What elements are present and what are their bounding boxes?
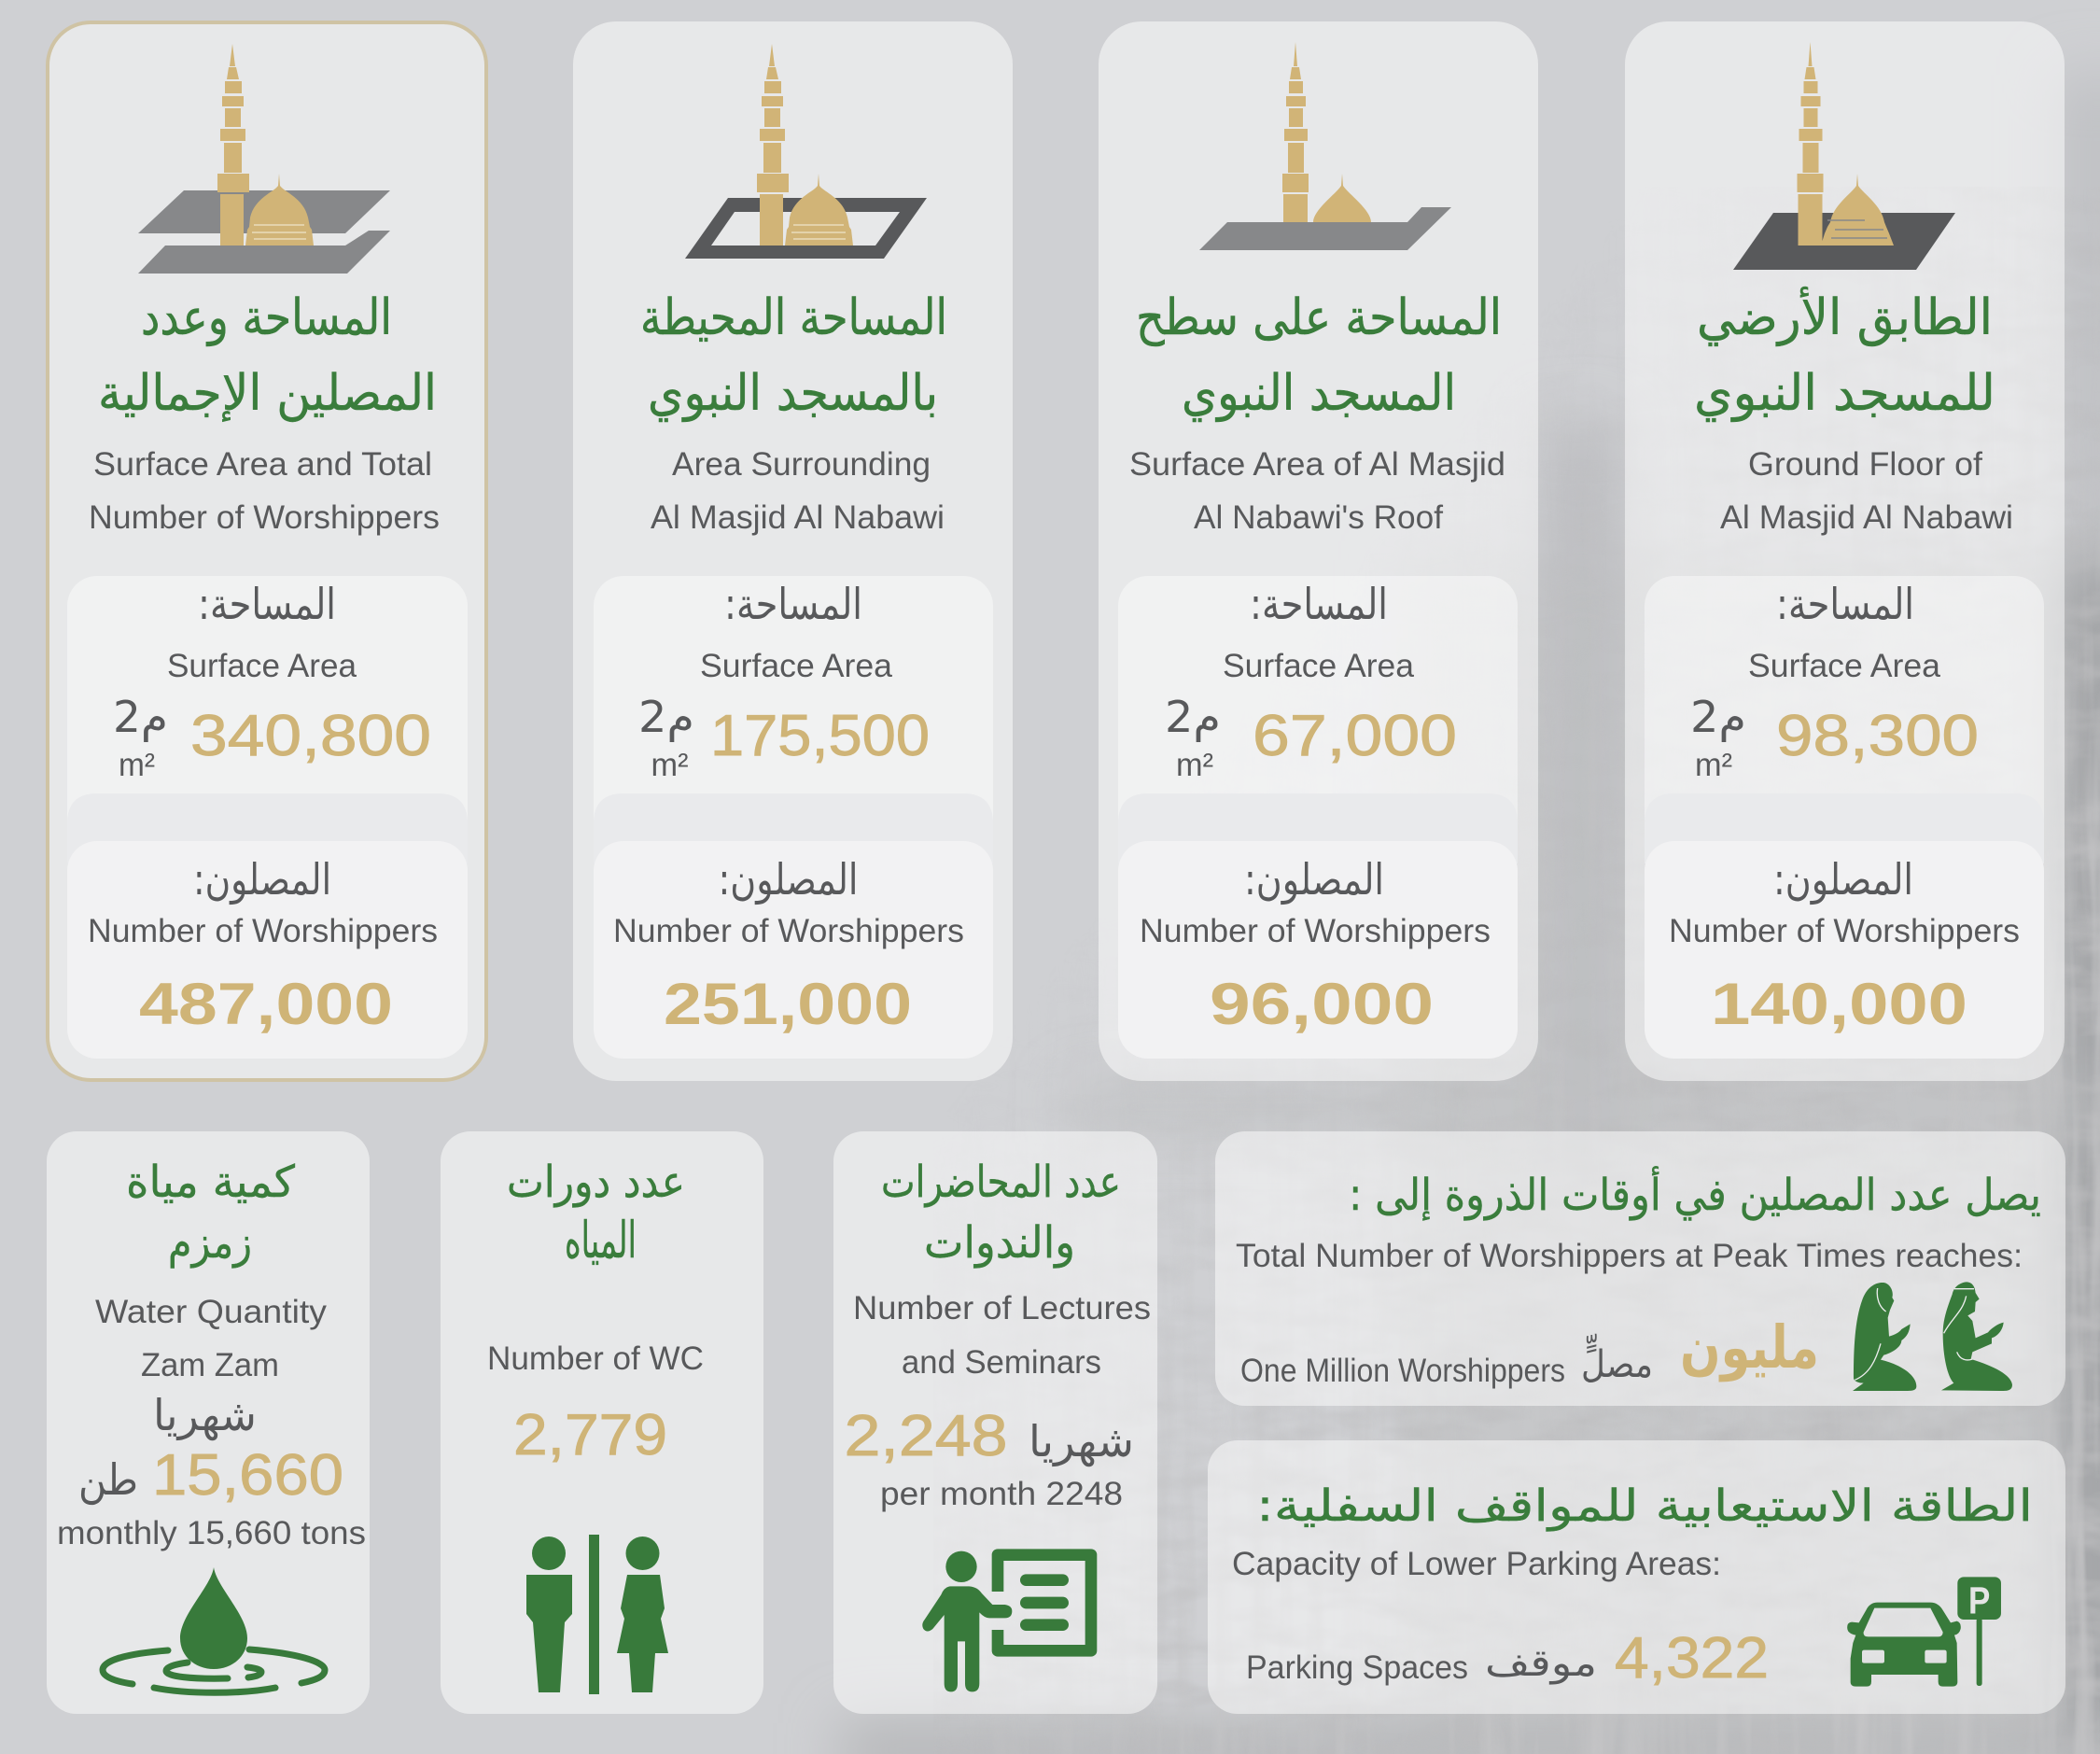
icon: minaret and dome on roof plate [1199,42,1451,250]
heading: English title: Area Surrounding [672,446,931,483]
text: monthly in Arabic: شهريا [1029,1416,1134,1467]
heading: Arabic title line 2: المصلين الإجمالية [98,365,437,422]
heading: Arabic title line 2: المياه [565,1211,637,1270]
panel: surface area of the roof [1099,21,1538,1081]
sub-panel: surface area: Surface Area [700,648,893,684]
heading: Arabic title line 2: المسجد النبوي [1182,365,1456,422]
sub-panel: worshippers: المصلون: [1773,854,1913,905]
sub-panel: worshippers: 487,000 [139,972,393,1037]
heading: Arabic title line 2: زمزم [168,1217,252,1269]
icon: minaret and dome on ground plate [1733,42,1955,270]
sub-panel: surface area: m² [1176,747,1213,783]
heading: English title line 2: Al Masjid Al Nabawi [1720,499,2013,536]
heading: English title: Surface Area and Total [93,446,432,483]
sub-panel: worshippers: 96,000 [1210,972,1434,1037]
sub-panel: surface area: Surface Area [167,648,357,684]
sub-panel: surface area: 98,300 [1776,704,1979,768]
sub-panel: worshippers [67,841,468,1059]
icon: praying woman and man [1853,1282,2012,1391]
text: one million worshippers: One Million Worshippers [1240,1353,1565,1389]
panel: worshippers at peak times [1215,1131,2065,1406]
icon: presenter at board [922,1551,1091,1691]
sub-panel: surface area: 340,800 [190,704,431,768]
panel: ground floor [1625,21,2065,1081]
sub-panel: surface area [1645,576,2044,863]
sub-panel: worshippers: Number of Worshippers [1140,913,1491,949]
heading: English title: Number of Lectures [853,1290,1151,1326]
sub-panel: worshippers: Number of Worshippers [88,913,438,949]
sub-panel: surface area [594,576,993,863]
icon: minaret and dome inside outlined plaza [685,44,927,259]
panel: number of WC [441,1131,763,1714]
text: monthly in Arabic: شهريا [153,1390,257,1441]
heading: English title line 2: and Seminars [902,1344,1101,1381]
heading: English title: Number of WC [487,1340,704,1377]
sub-panel: worshippers: المصلون: [719,854,859,905]
panel: parking capacity [1208,1440,2065,1714]
heading: Arabic title: المساحة المحيطة [640,289,947,346]
sub-panel: surface area [67,576,468,863]
sub-panel: surface area: م2 [638,692,694,742]
heading: English title line 2: Zam Zam [141,1347,279,1383]
sub-panel: worshippers: Number of Worshippers [613,913,964,949]
number: WC count: 2,779 [513,1403,667,1467]
icon: man and woman restroom sign [526,1535,668,1694]
sub-panel: worshippers: 251,000 [664,972,912,1037]
sub-panel: surface area: المساحة: [1250,579,1388,629]
sub-panel: surface area: Surface Area [1223,648,1415,684]
icon: water drop with ripples [103,1567,325,1692]
heading: English title: Surface Area of Al Masjid [1129,446,1505,483]
sub-panel: surface area: م2 [113,692,168,742]
heading: Arabic title: يصل عدد المصلين في أوقات الذروة إلى : [1349,1166,2041,1221]
panel: area surrounding the mosque [573,21,1013,1081]
number: parking count: 4,322 [1615,1626,1769,1691]
number: lectures per month: 2,248 [844,1404,1008,1468]
heading: Arabic title: الطابق الأرضي [1697,287,1993,346]
sub-panel: surface area: م2 [1690,692,1746,742]
heading: Arabic title line 2: بالمسجد النبوي [648,365,938,422]
heading: English title line 2: Al Masjid Al Nabawi [651,499,945,536]
heading: Arabic title line 2: والندوات [924,1217,1075,1269]
heading: Arabic title: عدد دورات [507,1157,685,1208]
text: tons in Arabic: طن [78,1454,138,1506]
heading: Arabic title: الطاقة الاستيعابية للمواقف السفلية: [1256,1480,2033,1532]
text: per month in English: per month 2248 [880,1476,1123,1512]
heading: English title: Total Number of Worshippers at Peak Times reaches: [1236,1238,2023,1274]
sub-panel: surface area: 175,500 [710,704,930,768]
sub-panel: surface area: Surface Area [1748,648,1941,684]
heading: English title: Capacity of Lower Parking Areas: [1232,1546,1721,1582]
icon: minaret and dome over two levels [138,44,390,274]
heading: Arabic title: المساحة وعدد [141,289,392,346]
heading: Arabic title: كمية مياة [126,1157,296,1208]
heading: English title: Ground Floor of [1748,446,1982,483]
sub-panel: worshippers: المصلون: [1244,854,1384,905]
text: parking spaces in Arabic: موقف [1485,1642,1597,1685]
number: million in Arabic: مليون [1680,1313,1819,1382]
sub-panel: surface area: m² [1695,747,1732,783]
heading: English title line 2: Number of Worshippers [89,499,440,536]
sub-panel: worshippers: المصلون: [193,854,331,905]
heading: English title: Water Quantity [95,1294,328,1330]
panel: zamzam water quantity [47,1131,370,1714]
sub-panel: surface area: m² [119,747,155,783]
sub-panel: surface area [1118,576,1518,863]
sub-panel: surface area: 67,000 [1253,704,1457,768]
heading: English title line 2: Al Nabawi's Roof [1194,499,1443,536]
heading: Arabic title: عدد المحاضرات [881,1157,1121,1208]
sub-panel: surface area: m² [651,747,689,783]
text: worshipper in Arabic: مصلٍّ [1581,1333,1653,1386]
number: tons per month: 15,660 [152,1443,343,1508]
sub-panel: surface area: المساحة: [724,579,862,629]
text: monthly tons in English: monthly 15,660 tons [57,1515,366,1551]
sub-panel: worshippers [594,841,993,1059]
heading: Arabic title line 2: للمسجد النبوي [1694,365,1995,422]
background: faded city photograph [834,82,2100,1754]
sub-panel: surface area: المساحة: [198,579,336,629]
panel: lectures and seminars [833,1131,1157,1714]
sub-panel: worshippers [1645,841,2044,1059]
text: parking spaces: Parking Spaces [1246,1649,1468,1686]
panel: surface area and total worshippers [48,22,486,1080]
sub-panel: worshippers: Number of Worshippers [1669,913,2020,949]
icon: car and parking sign [1847,1577,2001,1687]
sub-panel: worshippers [1118,841,1518,1059]
sub-panel: worshippers: 140,000 [1711,972,1967,1037]
sub-panel: surface area: م2 [1165,692,1221,742]
heading: Arabic title: المساحة على سطح [1136,289,1502,346]
icon: car and parking sign: P [1968,1579,1990,1621]
sub-panel: surface area: المساحة: [1776,579,1914,629]
